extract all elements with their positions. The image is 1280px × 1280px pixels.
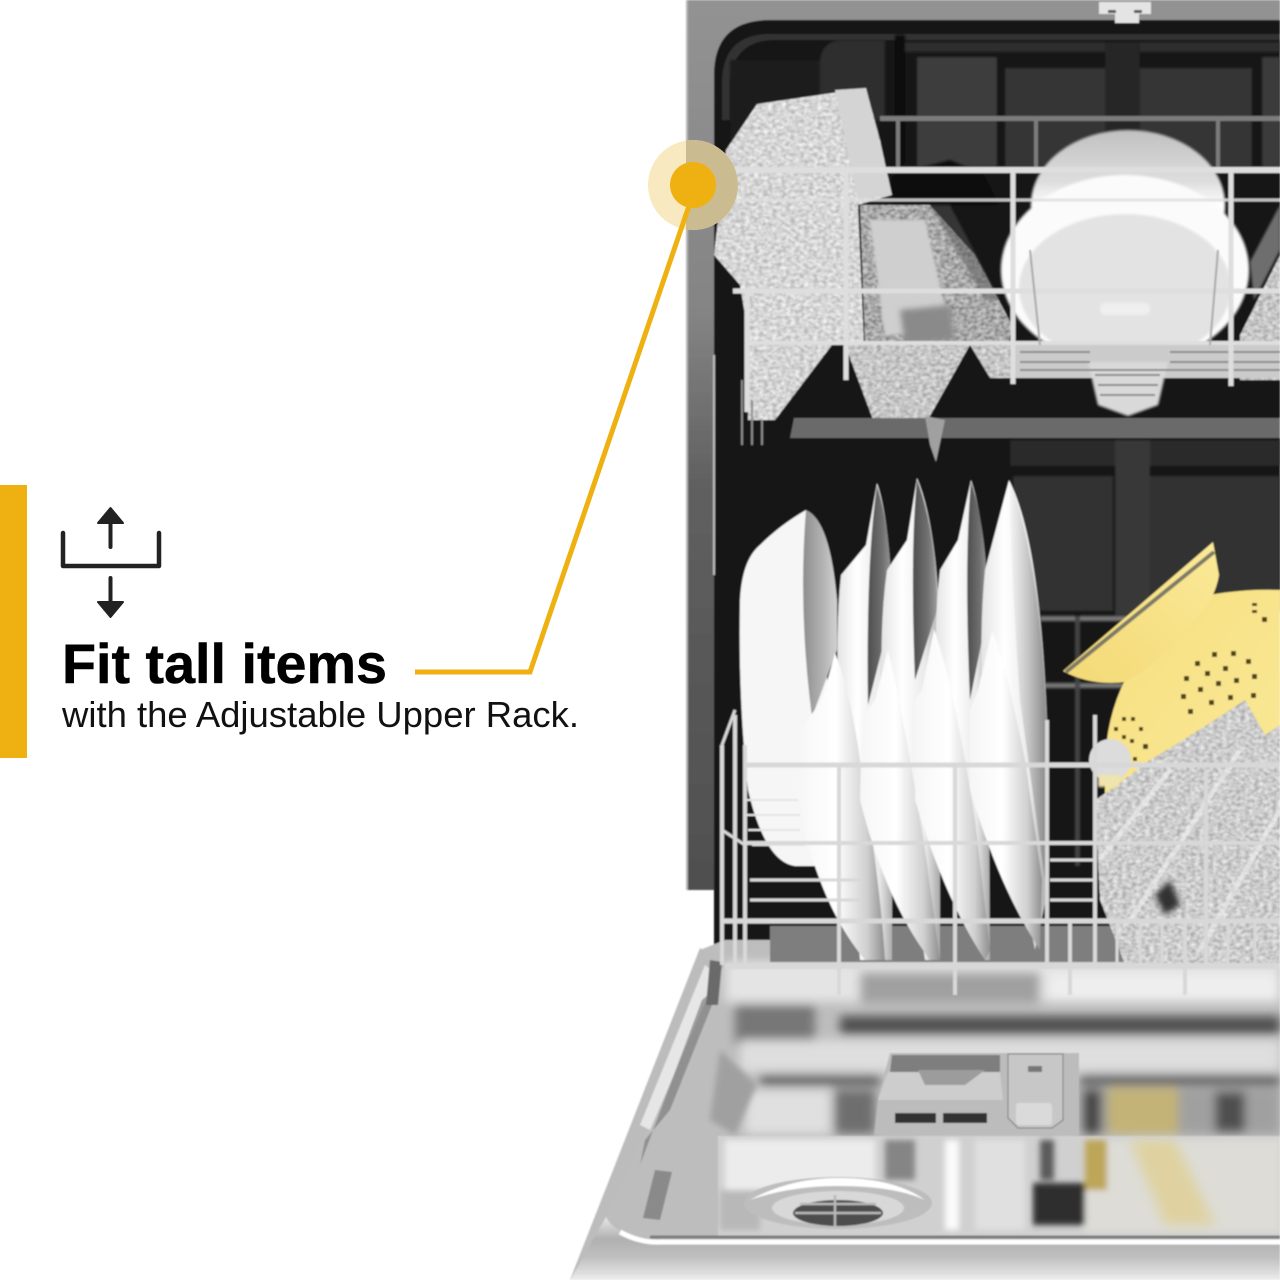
back row plates: [837, 478, 1047, 960]
dark utensil behind rack: [892, 160, 1000, 205]
upper rack rail: [790, 418, 1280, 438]
lower rack glass containers: [1089, 700, 1280, 965]
accent bar: [0, 485, 27, 758]
callout halo: [648, 140, 738, 230]
upper rack tines and basket: [745, 345, 1280, 425]
casserole dish: [740, 510, 837, 866]
callout marker: [670, 162, 716, 208]
door front lip: [570, 1217, 1280, 1280]
detergent dispenser: [874, 1053, 1079, 1135]
tub interior: [714, 20, 1280, 965]
yellow colander: [1063, 542, 1280, 800]
upper rack: white bowl: [1001, 130, 1249, 365]
front row plates: [796, 629, 1042, 960]
upper back rail: [880, 116, 1280, 169]
subheading: with the Adjustable Upper Rack.: [61, 694, 579, 735]
upper rack: glass containers: [714, 88, 1012, 345]
dishwasher photo: [570, 0, 1280, 1280]
upper rack: right side dish: [1240, 205, 1280, 380]
door side rail: [570, 948, 757, 1280]
callout leader line: [415, 200, 691, 672]
tub floor: [570, 940, 1280, 1280]
door frame: [686, 0, 1280, 890]
upper rack wires: [728, 170, 1280, 412]
drain filter: [744, 1177, 932, 1229]
lower rack reflection band: [770, 926, 1280, 962]
lower rack wires: [722, 710, 1280, 995]
icon: adjustable rack with up and down arrows: [63, 508, 159, 617]
top latch: [1099, 2, 1151, 23]
heading: Fit tall items: [62, 632, 387, 695]
back wall panels: [730, 35, 1280, 866]
